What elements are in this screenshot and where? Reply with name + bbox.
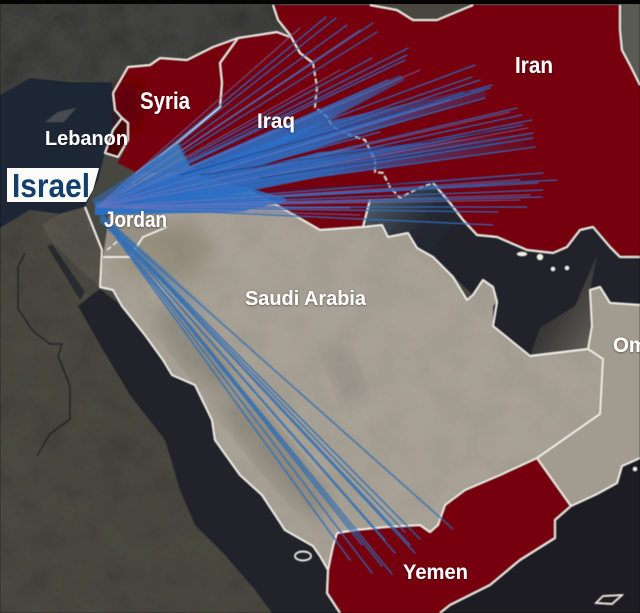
label: Jordan: Jordan	[104, 207, 167, 232]
land: Cyprus	[45, 108, 76, 122]
Jordan wedge tint	[137, 143, 192, 173]
label: Israel: Israel	[12, 167, 90, 204]
land texture: Turkey	[2, 4, 278, 84]
land: Sinai	[42, 207, 102, 287]
region: Lebanon	[105, 118, 128, 157]
islands	[295, 552, 622, 604]
label: Iran: Iran	[515, 52, 553, 78]
label: Saudi Arabia: Saudi Arabia	[245, 288, 367, 310]
land: Oman	[537, 287, 640, 506]
land texture: Saudi mountains	[113, 218, 367, 524]
solid blue bands	[92, 75, 534, 215]
land: Egypt	[0, 207, 300, 613]
sea: Red Sea	[78, 289, 340, 613]
label: Yemen: Yemen	[403, 561, 468, 584]
missile trajectories: eastward fan	[92, 17, 557, 225]
land: Turkey	[0, 4, 280, 95]
missile trajectories: southward fan	[100, 212, 453, 574]
sea: Mediterranean	[0, 78, 122, 228]
region: Yemen	[327, 458, 571, 613]
land texture: Africa	[2, 234, 161, 589]
river Nile	[18, 253, 70, 456]
land: Saudi Arabia	[100, 143, 603, 570]
label: Lebanon: Lebanon	[45, 128, 128, 150]
Israel white box	[7, 168, 99, 202]
sea: Arabian Sea	[440, 458, 640, 613]
dashed borders	[107, 63, 433, 250]
label: Syria: Syria	[140, 88, 191, 115]
gulf of Suez	[47, 244, 85, 300]
red shading	[114, 81, 142, 129]
land: UAE shadow	[530, 255, 597, 356]
land: Jordan	[103, 173, 167, 257]
top black bar	[0, 0, 640, 4]
label: Iraq: Iraq	[257, 110, 295, 133]
regions: Iran, Iraq, Syria in red	[113, 5, 640, 257]
land: Pakistan corner	[620, 4, 640, 85]
sea: Persian Gulf and Gulf of Oman	[363, 183, 640, 356]
